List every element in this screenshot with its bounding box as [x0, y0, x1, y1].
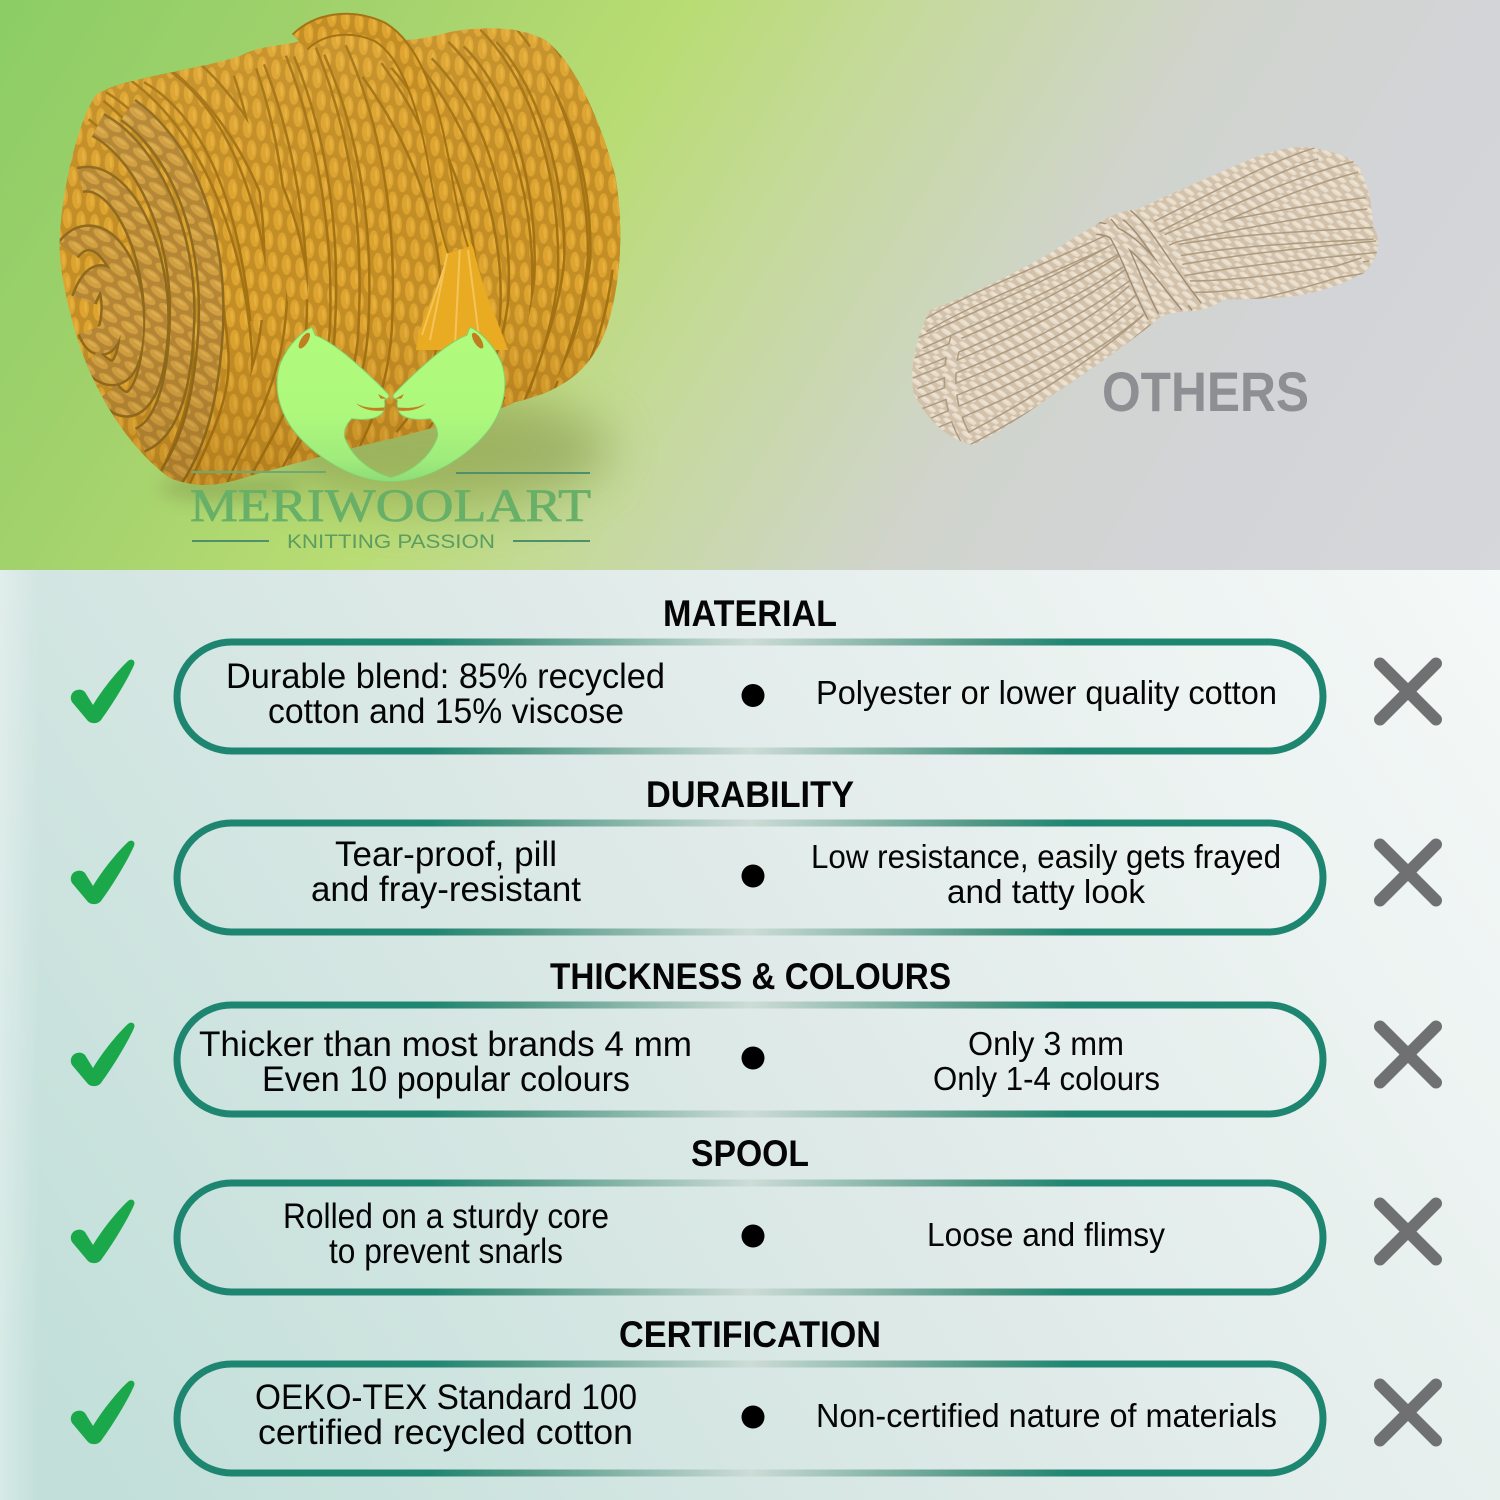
icon: grey cross [1380, 664, 1436, 720]
icon: grey cross [1380, 1204, 1436, 1260]
label: OTHERS: OTHERS [1102, 360, 1309, 423]
icon: grey cross [1380, 1384, 1436, 1440]
icon: green check [71, 1023, 134, 1086]
text: others: Low resistance, easily gets frayed [811, 838, 1281, 875]
heading: durability: DURABILITY [646, 774, 854, 815]
heading: material: MATERIAL [663, 593, 837, 634]
icon: green check [71, 660, 134, 723]
loose strand end over the top [300, 24, 458, 250]
centre dot [742, 1046, 764, 1070]
text: our product [311, 835, 581, 909]
icon: grey cross [1380, 844, 1436, 900]
text: our product: OEKO-TEX Standard 100 [255, 1378, 637, 1417]
comparison pill [177, 1183, 1323, 1292]
text: others: Non-certified nature of materials [816, 1397, 1277, 1434]
icon: green check [71, 1200, 134, 1263]
text: others: Loose and flimsy [927, 1216, 1165, 1253]
comparison pill [177, 823, 1323, 932]
text: our product: Even 10 popular colours [262, 1060, 630, 1099]
spool shadow [160, 392, 610, 508]
top background panel [0, 0, 1500, 570]
section: certification [71, 1314, 1436, 1473]
comparison pill [177, 1364, 1323, 1473]
icon: grey cross [1380, 1026, 1436, 1082]
photo: mustard macrame cord spool [60, 12, 620, 485]
text: our product [199, 1025, 692, 1099]
section: thickness and colours [71, 956, 1436, 1114]
logo: two facing heads emblem [277, 327, 505, 482]
logo ear and whisker details [296, 331, 486, 411]
centre dot [742, 1224, 764, 1248]
comparison pill [177, 642, 1323, 751]
text: our product: Tear-proof, pill [335, 835, 557, 874]
icon: green check [71, 1381, 134, 1444]
text: our product: Rolled on a sturdy core [283, 1197, 609, 1236]
text: our product: and fray-resistant [311, 870, 581, 909]
text: others [933, 1025, 1160, 1097]
logo wordmark [190, 471, 591, 553]
text: others: Only 1-4 colours [933, 1060, 1160, 1097]
centre dot [742, 684, 764, 707]
centre dot [742, 864, 764, 888]
text: others: and tatty look [947, 873, 1145, 910]
photo: loose cream rope bundle [903, 140, 1387, 450]
bottom background panel [0, 570, 1500, 1500]
icon: green check [71, 841, 134, 904]
text: our product: certified recycled cotton [258, 1413, 633, 1452]
text: our product: cotton and 15% viscose [268, 692, 624, 731]
logo wordmark: KNITTING PASSION [287, 532, 495, 553]
heading: thickness and colours: THICKNESS & COLOURS [550, 956, 951, 997]
text: our product: Thicker than most brands 4 mm [199, 1025, 692, 1064]
heading: certification: CERTIFICATION [619, 1314, 881, 1355]
text: our product: to prevent snarls [329, 1232, 563, 1271]
comparison pill [177, 1005, 1323, 1114]
text: others [811, 838, 1281, 910]
logo wordmark: MERIWOOLART [190, 480, 591, 532]
text: our product [226, 657, 665, 731]
text: others: Polyester or lower quality cotton [816, 674, 1277, 711]
text: others: Only 3 mm [968, 1025, 1124, 1062]
heading: spool: SPOOL [691, 1133, 809, 1174]
centre dot [742, 1406, 764, 1428]
section: spool [71, 1133, 1436, 1292]
text: our product: Durable blend: 85% recycled [226, 657, 665, 696]
text: our product [255, 1378, 637, 1452]
section: material [71, 593, 1436, 751]
text: our product [283, 1197, 609, 1271]
section: durability [71, 774, 1436, 932]
